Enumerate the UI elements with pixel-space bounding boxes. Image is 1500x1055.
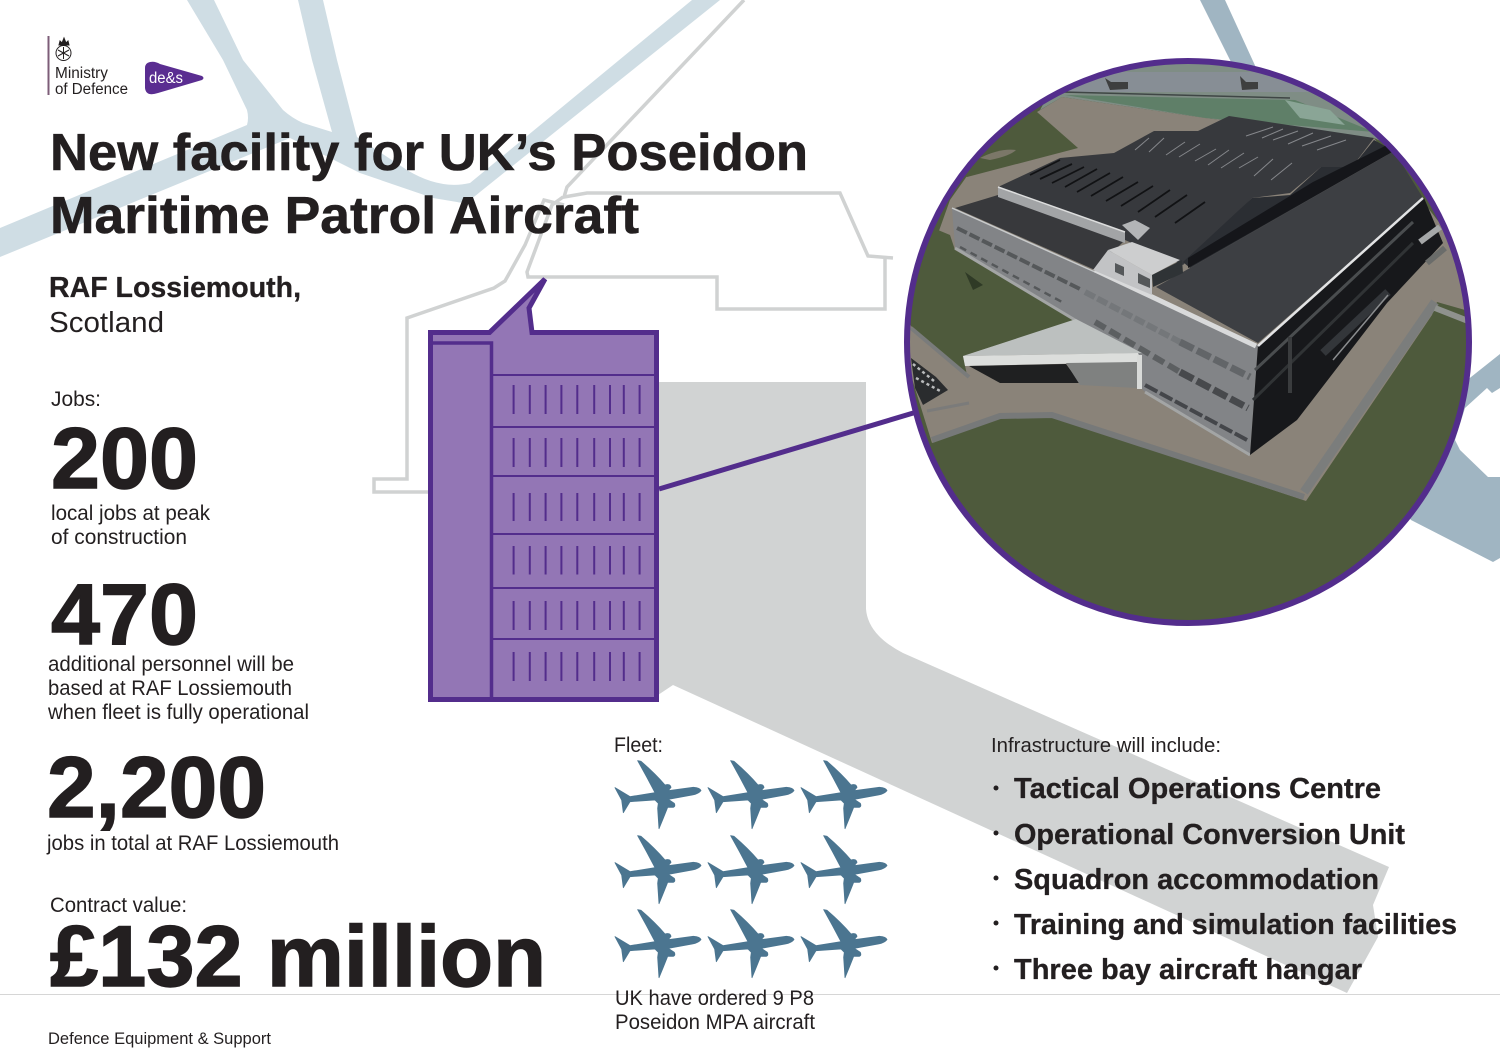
tan apron [900, 97, 1472, 501]
infrastructure list: Three bay aircraft hangar [1014, 954, 1362, 986]
icon: crest [56, 38, 71, 60]
stat: 470 personnel: 470 [51, 567, 198, 663]
infrastructure list [991, 735, 1457, 986]
stat: 2,200 jobs: jobs in total at RAF Lossiemouth [46, 832, 339, 855]
logo: de&amp;s: de&s [149, 70, 183, 87]
entrance canopy [963, 319, 1142, 356]
logo: de&amp;s [145, 62, 204, 94]
fleet panel: Poseidon MPA aircraft [615, 1011, 815, 1034]
roof shadow band [1183, 140, 1394, 268]
title: Maritime Patrol Aircraft [50, 187, 639, 245]
stat: 2,200 jobs [46, 740, 339, 855]
background: light blue taxiways top left [0, 0, 720, 257]
infrastructure list: Squadron accommodation [1014, 864, 1379, 896]
fleet panel: UK have ordered 9 P8 [615, 987, 814, 1010]
circular aerial view of facility [900, 55, 1480, 630]
right big roof [1156, 151, 1423, 343]
stat: 200 local jobs [51, 388, 210, 549]
infrastructure list: Infrastructure will include: [991, 735, 1221, 757]
stat: 200 local jobs: local jobs at peak [51, 502, 210, 525]
logo: Ministry of Defence [48, 36, 128, 98]
roof slats light [1135, 127, 1346, 180]
stat: 200 local jobs: Jobs: [51, 388, 101, 411]
stat: 470 personnel [47, 567, 309, 724]
background: grey runway [655, 382, 1389, 993]
main hangar roof [998, 116, 1374, 265]
kerbs [911, 328, 969, 377]
location [49, 272, 301, 339]
infrastructure list: Training and simulation facilities [1014, 909, 1457, 941]
stat: contract value: £132 million [50, 909, 546, 1005]
green left lawn [900, 230, 1075, 375]
stat: 470 personnel: additional personnel will be [48, 653, 294, 676]
infrastructure list: Tactical Operations Centre [1014, 773, 1381, 805]
infrastructure list: Operational Conversion Unit [1014, 819, 1405, 851]
connector line from plan to photo [659, 411, 920, 489]
stat: 200 local jobs: 200 [51, 411, 198, 507]
stat: contract value: Contract value: [50, 894, 187, 917]
far airfield [1040, 64, 1380, 141]
roof slats dark [1030, 160, 1205, 223]
stat: 470 personnel: based at RAF Lossiemouth [48, 677, 292, 700]
title: New facility for UK’s Poseidon [50, 124, 808, 182]
location: Scotland [49, 307, 164, 339]
stat: 200 local jobs: of construction [51, 526, 187, 549]
stat: 470 personnel: when fleet is fully operational [47, 701, 309, 724]
stat: 2,200 jobs: 2,200 [47, 740, 266, 836]
location: RAF Lossiemouth, [49, 272, 301, 304]
title [50, 124, 808, 245]
icon: aircraft grid of nine [615, 761, 887, 978]
white parapet edges [952, 208, 1095, 272]
footer credit: Defence Equipment & Support [48, 1029, 271, 1048]
car park [911, 358, 948, 405]
background: blue taxiway right [1395, 354, 1500, 562]
grass marker [965, 272, 983, 290]
fleet panel [614, 734, 887, 1034]
logo: Ministry of Defence: of Defence [55, 81, 128, 98]
green patch upper left [966, 112, 1078, 177]
building plan in purple [430, 279, 657, 700]
right dark facade [1250, 198, 1443, 455]
tower [1122, 220, 1150, 240]
left lower roof [955, 195, 1125, 270]
roof upstand strip [998, 187, 1125, 243]
fleet panel: Fleet: [614, 734, 663, 757]
logo: Ministry of Defence: Ministry [55, 65, 108, 82]
background: blue taxiway top right [1200, 0, 1258, 72]
background: site boundary outline [374, 0, 893, 492]
left facade [952, 208, 1258, 455]
footer divider [0, 994, 1500, 996]
